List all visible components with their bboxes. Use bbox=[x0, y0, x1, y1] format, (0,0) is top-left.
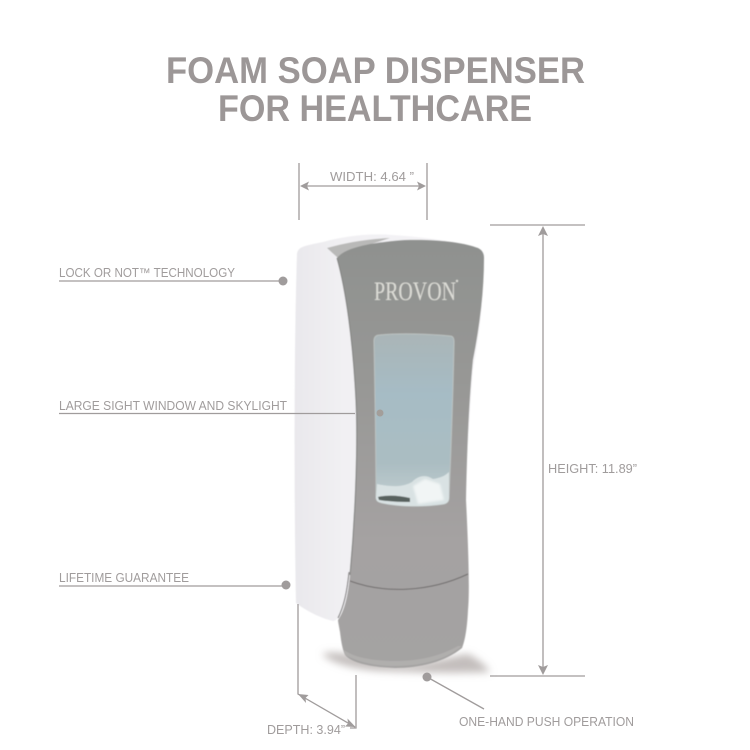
depth dimension: DEPTH: 3.94” bbox=[267, 723, 345, 737]
dispenser grey skylight strip bbox=[327, 238, 390, 258]
callout: one-hand push operation bbox=[422, 672, 634, 729]
title: FOR HEALTHCARE bbox=[218, 88, 532, 129]
dispenser panel dark edge bbox=[337, 258, 357, 575]
callout: large sight window and skylight bbox=[59, 399, 384, 416]
height dimension bbox=[490, 225, 637, 676]
dispenser PROVON logo: PROVON bbox=[374, 277, 456, 306]
dispenser bbox=[295, 234, 484, 668]
callout: lock or not technology: LOCK OR NOT™ TECHNOLOGY bbox=[59, 266, 236, 280]
width dimension: WIDTH: 4.64 ” bbox=[330, 170, 414, 184]
callout: one-hand push operation: ONE-HAND PUSH OPERATION bbox=[459, 715, 634, 729]
title: FOAM SOAP DISPENSER bbox=[166, 50, 585, 91]
dispenser sight window bbox=[374, 334, 454, 506]
width dimension bbox=[299, 163, 427, 220]
dispenser grey front panel bbox=[337, 240, 484, 668]
callout: lifetime guarantee bbox=[59, 571, 290, 590]
title bbox=[166, 50, 585, 129]
callout: large sight window and skylight: LARGE SIGHT WINDOW AND SKYLIGHT bbox=[59, 399, 287, 413]
depth dimension bbox=[267, 604, 356, 737]
callout: lifetime guarantee: LIFETIME GUARANTEE bbox=[59, 571, 189, 585]
height dimension: HEIGHT: 11.89” bbox=[548, 462, 637, 476]
floor shadow bbox=[322, 652, 490, 673]
callout: lock or not technology bbox=[59, 266, 288, 286]
dispenser soap foam bbox=[376, 472, 449, 506]
dispenser lever seam bbox=[338, 572, 468, 618]
dispenser white back shell bbox=[295, 234, 483, 621]
dispenser lever highlight bbox=[344, 646, 462, 666]
